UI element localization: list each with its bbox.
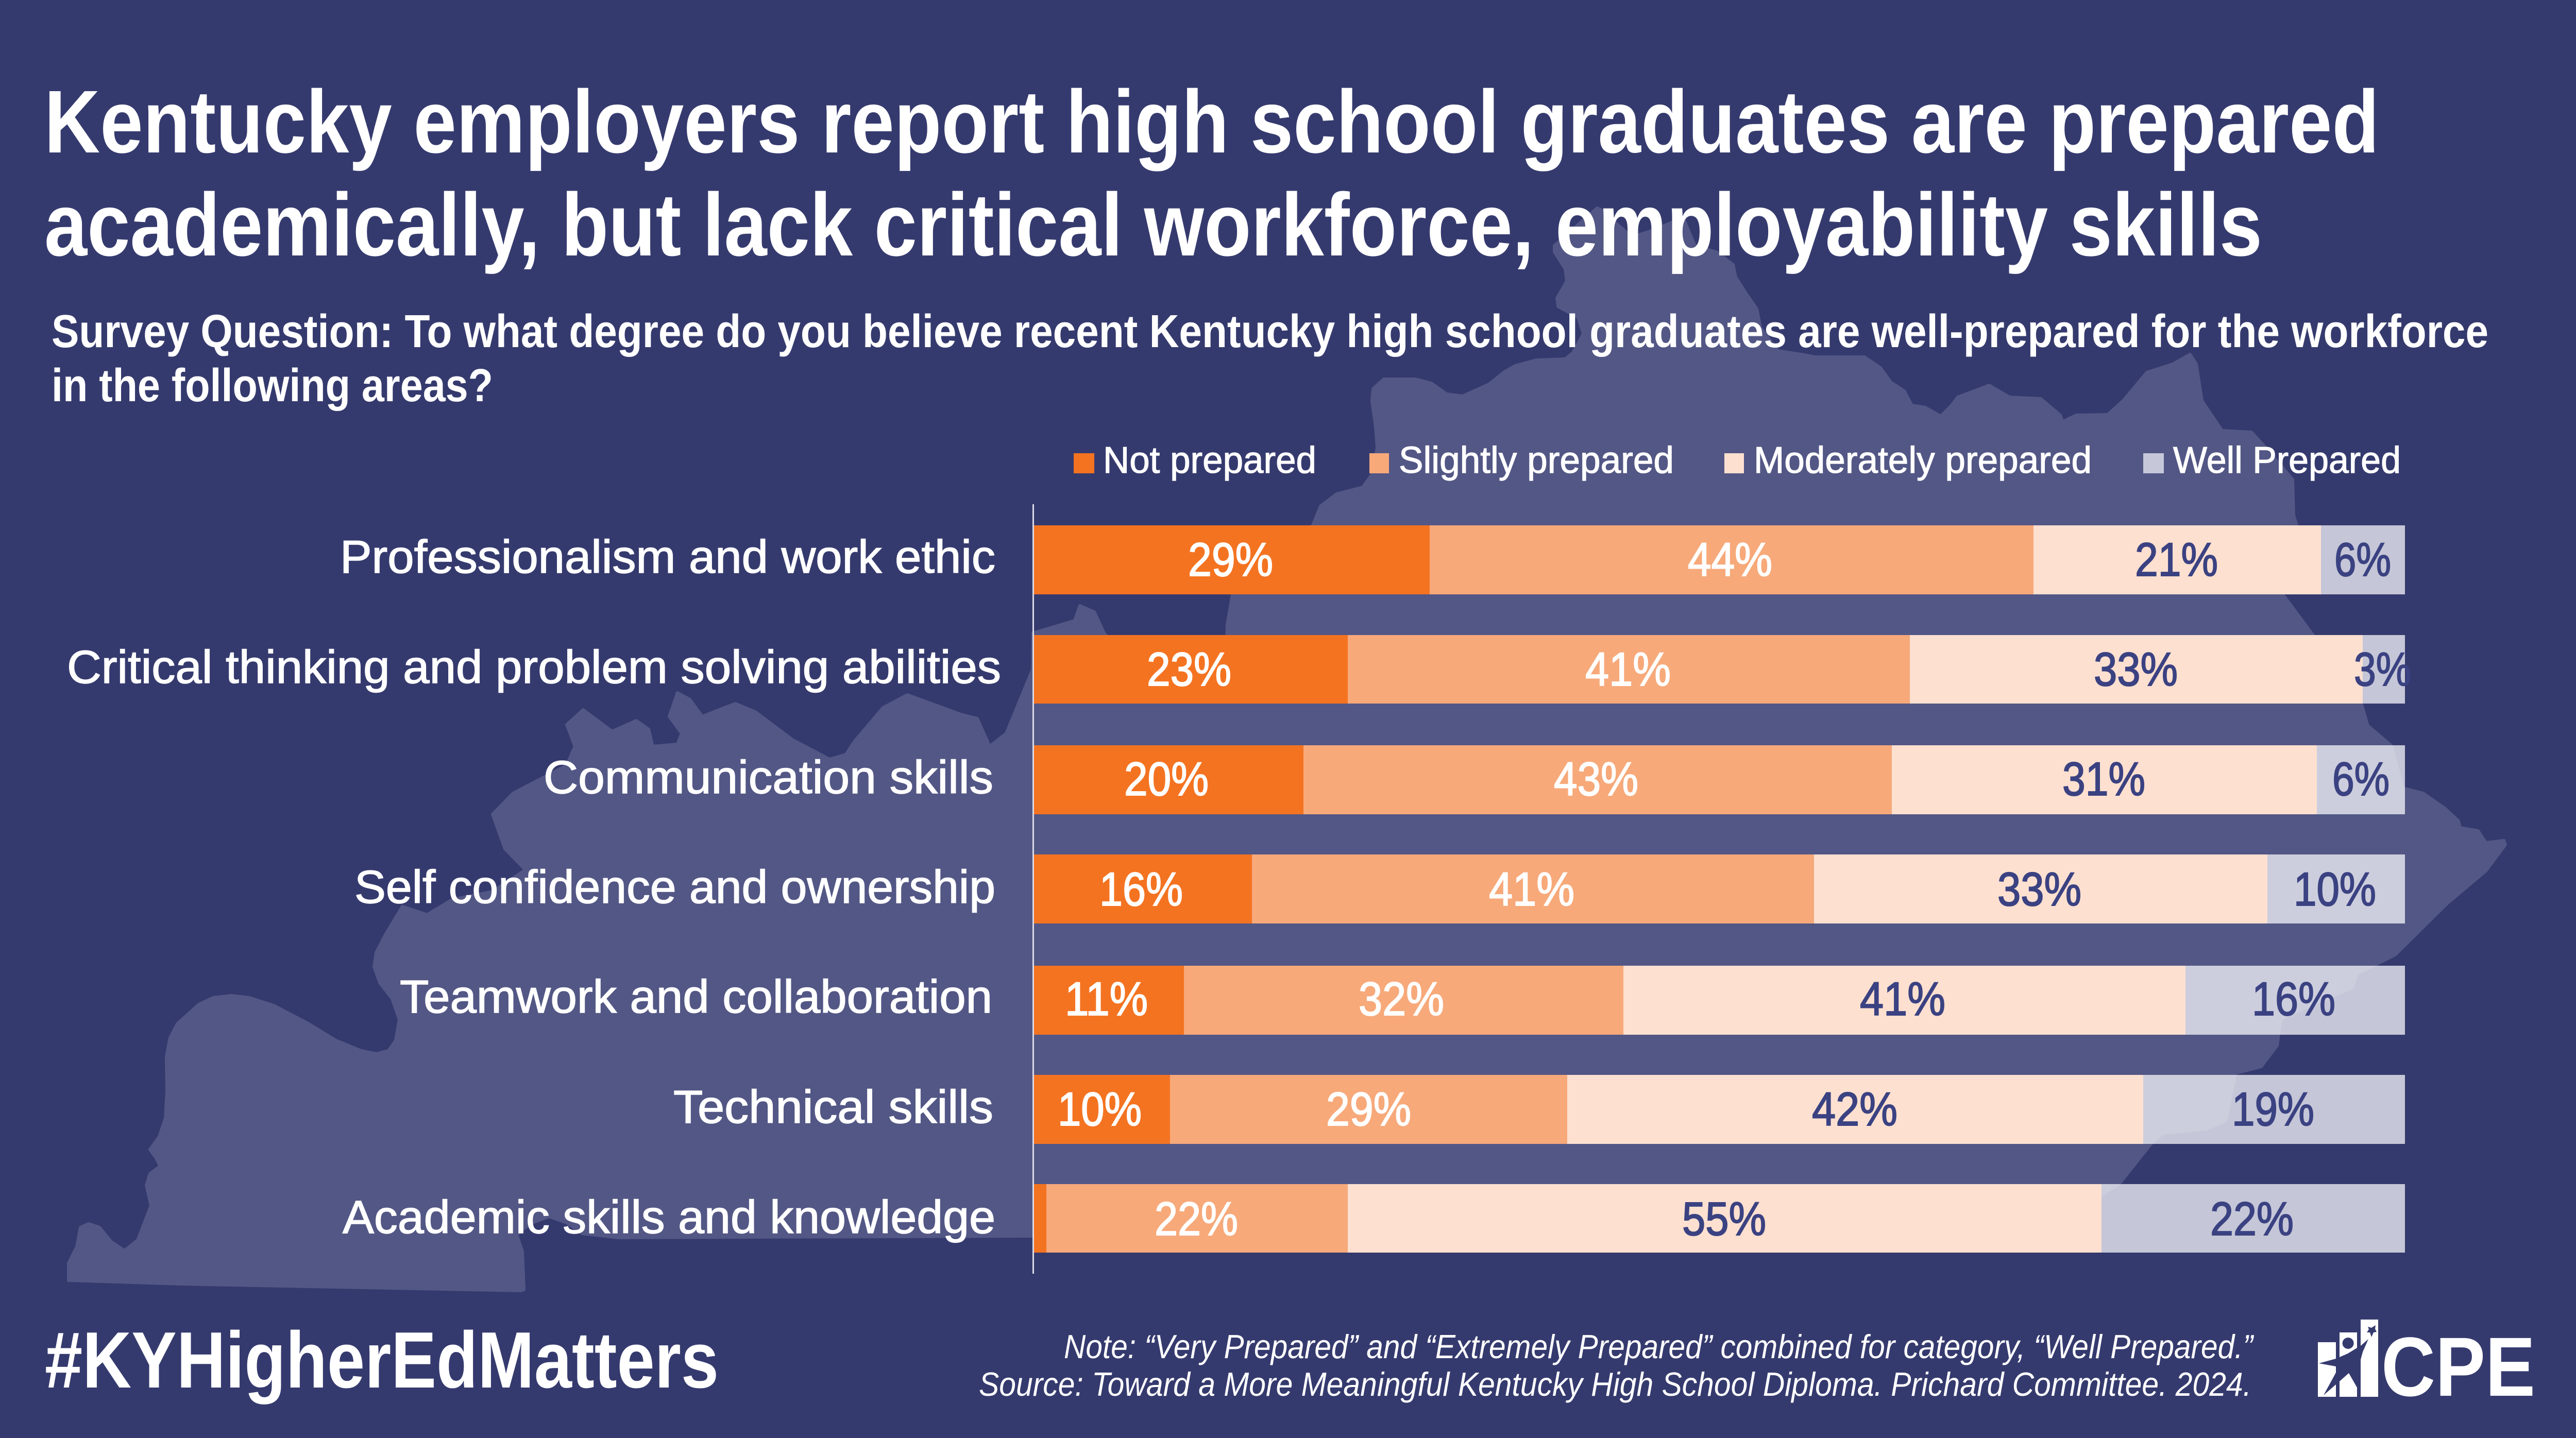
legend <box>1074 440 2401 481</box>
bar: professionalism: 21% <box>2135 534 2218 586</box>
legend item: moderately prepared: Moderately prepared <box>1754 440 2092 481</box>
bar: technical <box>1033 1075 2405 1144</box>
bar: teamwork: 41% <box>1860 973 1945 1025</box>
background map: Kentucky silhouette <box>69 208 2505 1291</box>
label: critical thinking: Critical thinking and problem solving abilities <box>67 642 1001 693</box>
CPE logo <box>2318 1320 2535 1414</box>
bar: communication: 31% <box>2062 753 2145 806</box>
title <box>44 72 2379 275</box>
bar: critical thinking: 3% <box>2354 643 2411 696</box>
label: academic: Academic skills and knowledge <box>343 1192 995 1243</box>
bar: communication: 20% <box>1124 753 1209 806</box>
bar: academic: 22% <box>2210 1193 2294 1245</box>
hashtag: #KYHigherEdMatters <box>45 1315 719 1405</box>
legend item: well prepared: Well Prepared <box>2173 440 2401 481</box>
bar: technical: 10% <box>1058 1083 1142 1136</box>
bar: communication <box>1033 745 2405 814</box>
legend item: slightly prepared: Slightly prepared <box>1399 440 1674 481</box>
bar: self confidence: 10% <box>2294 863 2376 916</box>
bar: teamwork: 16% <box>2252 973 2335 1025</box>
row labels <box>67 532 1001 1243</box>
label: self confidence: Self confidence and ownership <box>354 862 995 913</box>
bar: teamwork: 11% <box>1065 973 1148 1025</box>
bar: communication: 43% <box>1554 753 1638 806</box>
bar: self confidence: 16% <box>1099 863 1183 916</box>
bar: technical: 42% <box>1812 1083 1897 1136</box>
survey question subtitle <box>52 306 2488 412</box>
bar: critical thinking: 33% <box>2094 643 2178 696</box>
bar: professionalism: 44% <box>1688 534 1772 586</box>
survey question subtitle: in the following areas? <box>52 360 493 412</box>
note and source: Source: Toward a More Meaningful Kentucky High School Diploma. Prichard Committee. 2024. <box>979 1365 2251 1403</box>
bar: self confidence: 41% <box>1489 863 1574 916</box>
label: professionalism: Professionalism and work ethic <box>340 532 995 583</box>
label: communication: Communication skills <box>544 752 993 803</box>
logo icon: bars with star figure <box>2318 1320 2378 1397</box>
legend item: not prepared: Not prepared <box>1103 440 1316 481</box>
bar: academic <box>1033 1184 2405 1253</box>
bar: academic: 22% <box>1155 1193 1238 1245</box>
bar: professionalism <box>1033 525 2405 594</box>
bar: academic: 55% <box>1682 1193 1766 1245</box>
bar: communication: 6% <box>2332 753 2389 806</box>
title: academically, but lack critical workforce, employability skills <box>44 175 2262 275</box>
note and source <box>979 1328 2255 1403</box>
note and source: Note: “Very Prepared” and “Extremely Prepared” combined for category, “Well Prepared.” <box>1064 1328 2255 1365</box>
bar: technical: 19% <box>2232 1083 2314 1136</box>
bar: critical thinking: 23% <box>1147 643 1231 696</box>
label: teamwork: Teamwork and collaboration <box>400 971 992 1023</box>
bar: self confidence <box>1033 854 2405 923</box>
bar: critical thinking: 41% <box>1585 643 1671 696</box>
bar: self confidence: 33% <box>1997 863 2081 916</box>
bar: professionalism: 6% <box>2334 534 2391 586</box>
bar: critical thinking <box>1033 635 2411 704</box>
bar: professionalism: 29% <box>1188 534 1273 586</box>
bar: teamwork <box>1033 966 2405 1035</box>
stacked bar chart <box>1033 525 2411 1253</box>
logo wordmark: CPE <box>2381 1320 2535 1414</box>
bar: teamwork: 32% <box>1359 973 1444 1025</box>
bar: technical: 29% <box>1326 1083 1411 1136</box>
label: technical: Technical skills <box>673 1082 993 1133</box>
